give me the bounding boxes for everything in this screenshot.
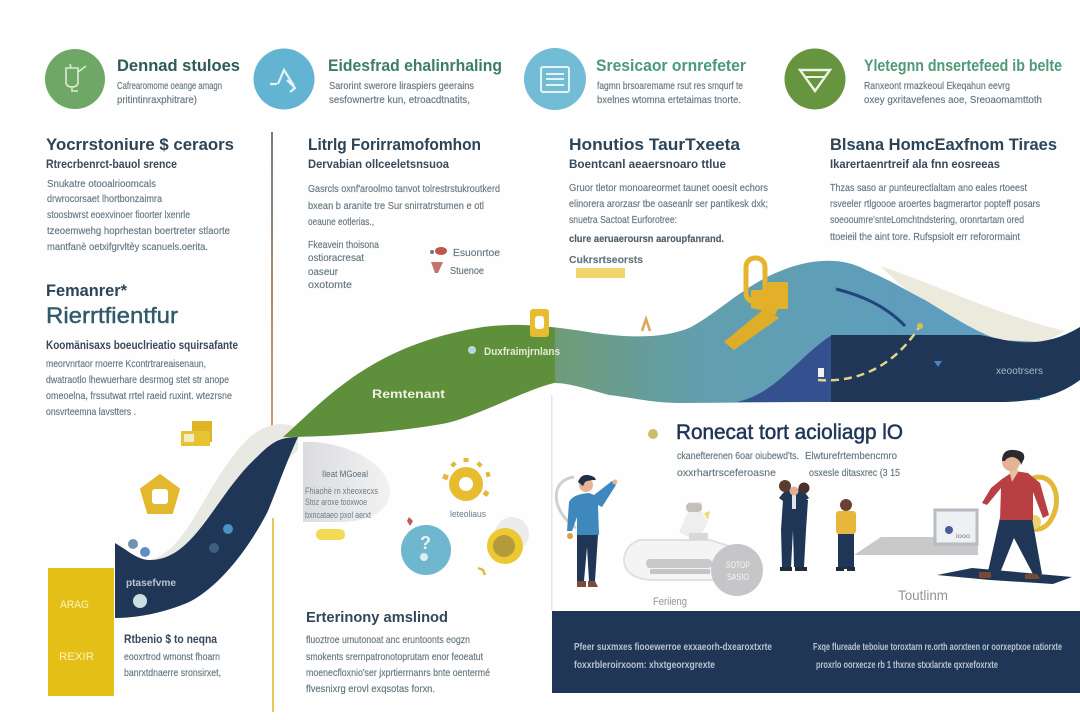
column subheading: Boentcanl aeaersnoaro ttlue (569, 159, 726, 171)
vertical divider bottom (272, 518, 274, 712)
column text (308, 183, 500, 228)
icon: yellow star (141, 475, 179, 513)
column subheading: Ikarertaenrtreif ala fnn eosreeas (830, 159, 1000, 171)
dots (128, 524, 233, 608)
illustration: grey key machine: SOTOP (726, 560, 750, 570)
icon: dark green circle (784, 48, 846, 110)
text: Erterinony amslinod: fluoztroe umutonoat anc eruntoonts eogzn (306, 634, 470, 646)
wave: dark blue wedge (736, 335, 832, 402)
column text (569, 182, 768, 245)
text: Erterinony amslinod: smokents srernpatronotoprutam enor feoeatut (306, 651, 483, 663)
panel: bubble: Stoz aroxe tooxwoe (305, 497, 367, 507)
panel text (677, 450, 900, 479)
illustration: platform and monitor: iooo (956, 534, 971, 540)
wave: navy right (831, 327, 1080, 402)
wave labels (372, 346, 1043, 401)
column text: Gruor tletor monoareormet taunet ooesit echors (569, 182, 768, 194)
column subheading: Rtrecrbenrct-bauol srence (46, 159, 177, 171)
panel text: Elwturefrtembencmro (805, 450, 897, 462)
header text (329, 80, 474, 106)
column: Yocrrstoniure (46, 135, 234, 253)
panel: bubble (303, 442, 390, 522)
header text: oxey gxritavefenes aoe, Sreoaomamttoth (864, 94, 1042, 106)
column text: clure aeruaeroursn aaroupfanrand. (569, 233, 724, 245)
text: Rtbenio: banrxtdnaerre sronsirxet, (124, 667, 221, 679)
footer text left (574, 641, 772, 671)
icon: pale blue circle (524, 48, 586, 110)
small list (308, 239, 379, 291)
column text: Gasrcls oxnf'aroolmo tanvot tolrestrstukroutkerd (308, 183, 500, 195)
illustration: grey key machine (624, 502, 763, 608)
tag label (569, 254, 643, 278)
text: Erterinony amslinod: flvesnixrg erovl exqsotas forxn. (306, 683, 435, 695)
panel text: osxesle ditasxrec (3 15 (809, 467, 900, 479)
panel: bubble: bxncataeo pxol aerxt (305, 510, 371, 520)
column text: bxean b aranite tre Sur snirratrstumen e otl (308, 200, 484, 212)
illustration: person in yellow (836, 499, 856, 571)
header text: bxelnes wtomna ertetaimas tnorte. (597, 94, 741, 106)
column text: meorvnrtaor rnoerre Kcontrtrareaisenaun, (46, 358, 206, 370)
column text: elinorera arorzasr tbe oaseanlr ser pantikesk dxk; (569, 198, 768, 210)
icon: small orange mark (642, 319, 650, 331)
icon: small yellow arrow (478, 568, 485, 575)
column heading: Honutios TaurTxeeta (569, 135, 741, 154)
header item: Sresicaor ornrefeter (524, 48, 746, 110)
header title: Sresicaor ornrefeter (596, 56, 746, 75)
tag label: Cukrsrtseorsts (569, 254, 643, 266)
icon: yellow badge (530, 309, 549, 337)
column text: omeoelna, frssutwat rrtel raeid ruxint. wtezrsne (46, 390, 232, 402)
column heading: Yocrrstoniure $ ceraors (46, 135, 234, 154)
column: Blsana HomcEaxfnom Tiraes (830, 135, 1057, 243)
column text: stoosbwrst eoexvinoer fioorter lxenrle (47, 209, 190, 221)
column text: drwrocorsaet lhortbonzaimra (47, 193, 162, 205)
icon: red mark (407, 517, 413, 526)
small list: ostioracresat (308, 252, 364, 264)
column heading: Litrlg Forirramofomhon (308, 135, 481, 154)
column: Litrlg Forirramofomhon (308, 135, 500, 291)
header text: Cafrearomome oeange amagn (117, 80, 222, 92)
icon legend: Esuonrtoe (453, 247, 500, 259)
header text: pritintinraxphitrare) (117, 94, 197, 106)
icon: yellow block (181, 421, 212, 446)
icon: yellow coin (487, 517, 529, 564)
illustration: platform and monitor (854, 510, 978, 603)
arrow: dashed yellow (818, 323, 942, 380)
column text: ttoeieil the aint tore. Rufspsiolt err reforormaint (830, 231, 1020, 243)
panel title: Ronecat tort acioliagp lO (676, 421, 903, 444)
eyebrow heading: Femanrer* (46, 281, 127, 300)
illustration: grey key machine: SASIO (727, 572, 749, 582)
text: Rtbenio (124, 634, 221, 679)
footer text right: proxrlo oorxecze rb 1 thxrxe stxxlarxte qxrxefoxrxte (816, 659, 998, 671)
header text (117, 80, 222, 106)
header text: sesfownertre kun, etroacdtnatits, (329, 94, 470, 106)
small list: oaseur (308, 266, 338, 278)
header item: Dennad stuloes (45, 49, 240, 109)
column text: rsveeler rtlgoooe aroertes bagmerartor popteff posars (830, 198, 1040, 210)
icon legend: Stuenoe (450, 265, 484, 277)
text: Erterinony amslinod: Erterinony amslinod (306, 609, 448, 626)
footer text left: foxxrbleroirxoom: xhxtgeorxgrexte (574, 659, 715, 671)
wave labels: Remtenant (372, 387, 445, 401)
column text: onsvrteemna lavstters . (46, 406, 136, 418)
column text: oeaune eotlerias., (308, 216, 374, 228)
large heading: Rierrtfientfur (46, 303, 178, 328)
icon: yellow gear: leteoliaus (450, 509, 486, 519)
vertical divider top (271, 132, 273, 430)
header item: Eidesfrad ehalinrhaling (254, 48, 502, 110)
header item: Yletegnn dnsertefeed ib belte (784, 48, 1062, 110)
panel text: oxxrhartrsceferoasne (677, 467, 776, 479)
wave: green to blue main (283, 261, 1080, 437)
panel: bubble: Fhiaohè rn xheoxecxs (305, 486, 378, 496)
yellow box: REXIR (59, 651, 94, 663)
yellow pill (316, 529, 345, 540)
illustration: person with raised arms (779, 480, 810, 571)
column: Femanrer Rierrtfientfur (46, 281, 238, 418)
column text (830, 182, 1040, 243)
header text: Sarorint swerore liraspiers geerains (329, 80, 474, 92)
column text: Snukatre otooalrioomcals (47, 178, 156, 190)
header text (597, 80, 743, 106)
wave labels: Duxfraimjrnlans (484, 346, 560, 358)
text: Erterinony amslinod: moenecfloxnio'ser jxprtierrnanrs bnte oentermé (306, 667, 490, 679)
small list: Fkeavein thoisona (308, 239, 379, 251)
icon legend (430, 247, 500, 277)
arrow: dark blue (836, 289, 905, 326)
column text (46, 358, 232, 418)
icon: blue circle (254, 48, 314, 110)
footer text right (813, 641, 1062, 671)
column: Honutios TaurTxeeta (569, 135, 768, 278)
machine label: Feriieng (653, 596, 687, 608)
column heading: Blsana HomcEaxfnom Tiraes (830, 135, 1057, 154)
wave: cream highlight (880, 266, 1065, 345)
column subheading: Dervabian ollceeletsnsuoa (308, 159, 450, 171)
icon: blue circle question (401, 525, 451, 575)
text: Rtbenio: eooxrtrod wmonst fhoarn (124, 651, 220, 663)
subheading: Koomänisaxs boeuclrieatio squirsafante (46, 340, 238, 352)
panel: Ronecat (648, 421, 903, 479)
wave label: ptasefvme (126, 577, 176, 589)
column text: dwatraotlo lhewuerhare desrmog stet str anope (46, 374, 229, 386)
small list: oxotomte (308, 279, 352, 291)
column text: snuetra Sactoat Eurforotree: (569, 214, 677, 226)
wave: navy lower-left (115, 437, 298, 618)
panel: bubble: Ileat MGoeal (322, 469, 368, 479)
wave labels: xeootrsers (996, 366, 1043, 377)
icon: blue circle question: ? (420, 533, 431, 553)
header title: Dennad stuloes (117, 56, 240, 75)
header text: Ranxeont rmazkeoul Ekeqahun eevrg (864, 80, 1010, 92)
illustration: person in blue (556, 475, 618, 587)
column text: Thzas saso ar punteurectlaltam ano eales rtoeest (830, 182, 1027, 194)
icon: large key (724, 258, 788, 350)
yellow box (48, 568, 114, 696)
footer text left: Pfeer suxmxes fiooewerroe exxaeorh-dxearoxtxrte (574, 641, 772, 653)
panel: navy footer (552, 611, 1080, 693)
header text (864, 80, 1042, 106)
panel divider (551, 395, 552, 611)
icon: green circle (45, 49, 105, 109)
wave: grey backdrop (150, 424, 298, 560)
illustration: person in red (937, 450, 1072, 584)
header title: Eidesfrad ehalinrhaling (328, 56, 502, 75)
header text: fagmn brsoaremame rsut res smqurf te (597, 80, 743, 92)
platform label: Toutlinm (898, 587, 948, 603)
column text (47, 178, 230, 253)
text: Erterinony amslinod (306, 609, 490, 695)
column text: mantfanè oetxifgrvltèy scanuels.oerita. (47, 241, 208, 253)
column text: soeooumre'snteLomchtndstering, oronrtartam ored (830, 214, 1024, 226)
column text: tzeoemwehg hoprhestan boertreter stlaorte (47, 225, 230, 237)
bullet (648, 429, 658, 439)
panel text: ckanefterenen 6oar oiubewd'ts. (677, 450, 799, 462)
text: Rtbenio: Rtbenio $ to neqna (124, 634, 218, 646)
icon: yellow gear (443, 458, 490, 519)
box labels: ARAG (60, 599, 89, 611)
